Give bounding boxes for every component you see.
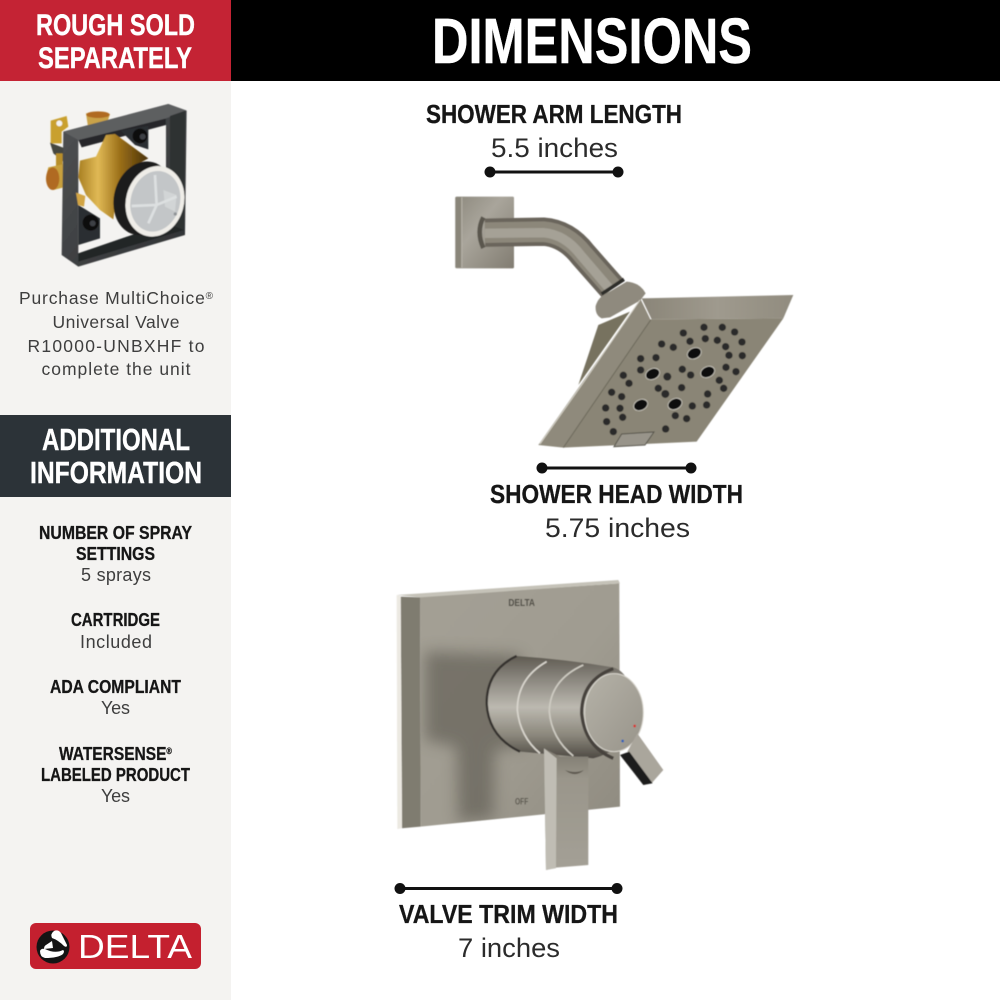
text: purchase note: Universal Valve — [52, 312, 180, 332]
panel: left sidebar — [0, 0, 231, 1000]
top face — [642, 295, 793, 319]
label: shower arm length: SHOWER ARM LENGTH — [426, 99, 682, 129]
title: dimensions — [231, 0, 1000, 81]
banner: rough sold separately: ROUGH SOLD — [36, 9, 195, 42]
logo: delta: DELTA — [78, 928, 192, 965]
text: purchase note — [19, 288, 214, 379]
arrow: valve trim dimension line — [394, 883, 622, 894]
lever tab — [614, 432, 654, 447]
text: number of spray settings: SETTINGS — [76, 543, 155, 564]
cylinder — [487, 656, 633, 758]
plate shadow — [425, 652, 523, 822]
banner: rough sold separately — [0, 0, 231, 81]
text: cartridge: Included — [80, 632, 152, 652]
arrow: shower head dimension line — [536, 462, 696, 474]
collar — [596, 282, 646, 318]
top pipe — [86, 111, 110, 127]
text: purchase note: R10000-UNBXHF to — [28, 336, 204, 356]
cartridge — [105, 155, 192, 243]
text: number of spray settings: NUMBER OF SPRAY — [39, 522, 193, 543]
text: ada compliant: Yes — [101, 698, 130, 718]
mounting bracket — [51, 116, 68, 143]
title: dimensions: DIMENSIONS — [432, 5, 752, 77]
head back — [578, 312, 630, 385]
icon: rough-in valve photo — [46, 104, 192, 267]
left pipe — [46, 164, 67, 190]
frame — [62, 104, 187, 267]
plate lettering: delta: DELTA — [508, 598, 535, 609]
banner: additional information — [0, 415, 231, 497]
label: valve trim width: VALVE TRIM WIDTH — [399, 899, 618, 929]
text: purchase note: ® — [206, 291, 214, 302]
brass body — [76, 134, 148, 219]
text: ada compliant: ADA COMPLIANT — [50, 676, 182, 697]
corner mounts — [78, 126, 148, 245]
plate lettering: off: OFF — [515, 796, 529, 806]
front face — [563, 318, 783, 448]
text: cartridge — [71, 609, 160, 652]
shower arm — [480, 217, 624, 294]
label: shower head width: SHOWER HEAD WIDTH — [490, 479, 743, 509]
text: watersense labeled product: WATERSENSE — [59, 743, 187, 764]
banner: additional information: ADDITIONAL — [42, 423, 190, 457]
text: number of spray settings: 5 sprays — [81, 565, 151, 585]
side strip — [538, 299, 651, 448]
banner: rough sold separately: SEPARATELY — [38, 42, 192, 75]
label: shower head width — [490, 479, 743, 543]
text: number of spray settings — [39, 522, 193, 585]
label: shower arm length: 5.5 inches — [491, 133, 618, 163]
text: watersense labeled product: ® — [166, 746, 172, 756]
text: watersense labeled product: Yes — [101, 786, 130, 806]
label: shower arm length — [426, 99, 682, 163]
handle dial — [585, 674, 643, 752]
rear lever — [620, 725, 663, 785]
text: cartridge: CARTRIDGE — [71, 609, 160, 630]
wall flange — [455, 197, 514, 268]
illustration: shower head and arm — [455, 197, 793, 448]
text: ada compliant — [50, 676, 182, 718]
label: shower head width: 5.75 inches — [545, 513, 690, 543]
text: watersense labeled product — [41, 743, 191, 806]
logo: delta — [30, 923, 201, 969]
front lever — [544, 748, 588, 870]
text: purchase note: complete the unit — [42, 359, 191, 379]
arrow: shower arm dimension line — [484, 166, 624, 178]
label: valve trim width — [399, 899, 618, 963]
large spray holes — [632, 345, 717, 413]
text: watersense labeled product: LABELED PRODUCT — [41, 764, 191, 785]
text: purchase note: Purchase MultiChoice — [19, 288, 205, 308]
illustration: valve trim — [397, 580, 663, 870]
banner: additional information: INFORMATION — [30, 456, 202, 490]
label: valve trim width: 7 inches — [458, 933, 560, 963]
small spray holes — [602, 324, 746, 435]
plate — [397, 580, 620, 829]
